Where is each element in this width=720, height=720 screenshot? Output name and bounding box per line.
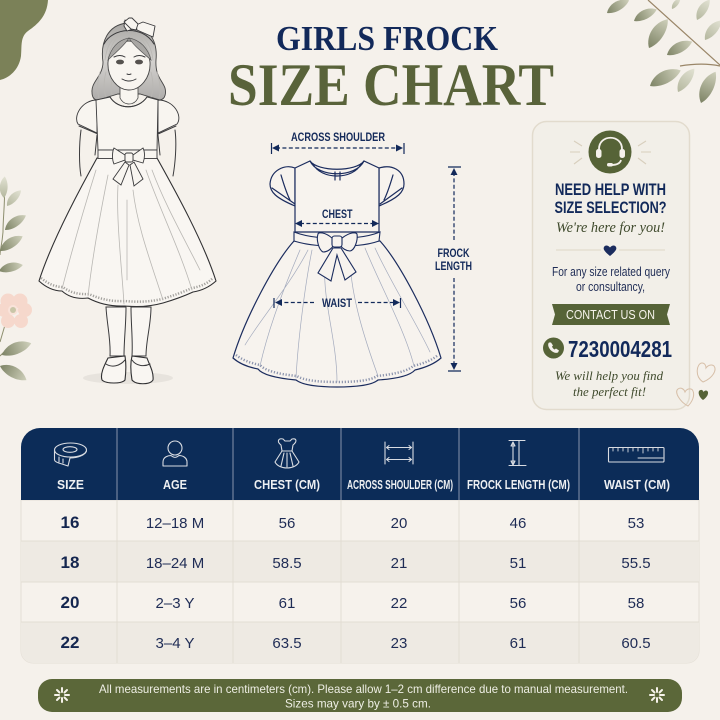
card heading: SIZE SELECTION? [554, 199, 666, 217]
headset icon [570, 130, 651, 174]
row: size 22: 63.5 [272, 635, 302, 652]
row: size 20: 22 [391, 595, 407, 612]
column labels: WAIST (CM) [604, 477, 670, 492]
row: size 18: 51 [510, 555, 526, 572]
row: size 18: 58.5 [272, 555, 302, 572]
column labels: ACROSS SHOULDER (CM) [347, 477, 453, 492]
row: size 20: 56 [510, 595, 526, 612]
bodice [96, 97, 158, 150]
waist bow [113, 162, 143, 186]
row: size 22: 61 [510, 635, 526, 652]
size table [21, 428, 699, 663]
footer text: Sizes may vary by ± 0.5 cm. [285, 696, 431, 710]
row: size 22: 3–4 Y [156, 635, 194, 652]
icon: ruler [608, 448, 664, 462]
heart divider [556, 246, 665, 256]
icon: right flower [650, 688, 664, 702]
row: size 16: 20 [391, 515, 407, 532]
footer note bar [38, 679, 682, 712]
frock waist band [294, 232, 380, 246]
icon: person [163, 441, 187, 466]
column labels: AGE [163, 477, 187, 492]
title: size chart: SIZE CHART [228, 52, 554, 118]
measure: across shoulder [272, 132, 404, 154]
measure: frock length: FROCK [438, 248, 470, 260]
frock skirt [233, 241, 441, 387]
row: size 16: 53 [628, 515, 644, 532]
row: size 16: 16 [61, 513, 79, 532]
measure: across shoulder: ACROSS SHOULDER [291, 132, 386, 144]
row: size 16: 46 [510, 515, 526, 532]
frock bow [318, 248, 356, 281]
icon: length [509, 440, 526, 466]
row: size 20: 20 [61, 593, 79, 612]
contact banner [552, 304, 670, 325]
row: size 22: 23 [391, 635, 407, 652]
decorative hearts [677, 363, 715, 406]
row: size 20: 61 [279, 595, 295, 612]
neck and face [120, 84, 138, 104]
leaves: top right branch [604, 0, 720, 105]
frock sleeves [270, 167, 295, 206]
row: size 20: 58 [628, 595, 644, 612]
row: size 20: 2–3 Y [156, 595, 194, 612]
measure: waist [274, 298, 400, 310]
card closing note [555, 368, 663, 399]
card body text [552, 265, 671, 294]
icon: tape measure [54, 443, 86, 466]
waist band [98, 150, 157, 158]
column labels [57, 477, 670, 492]
row: size 22 [61, 633, 651, 652]
column labels: SIZE [57, 477, 84, 492]
row: size 18: 55.5 [621, 555, 651, 572]
measure: frock length [435, 167, 472, 371]
card heading: NEED HELP WITH [555, 181, 666, 199]
column labels: CHEST (CM) [254, 477, 320, 492]
title: girls frock: GIRLS FROCK [276, 19, 498, 58]
table body background [21, 500, 699, 663]
card heading [554, 181, 666, 217]
row: size 20 [61, 593, 644, 612]
frock measurement diagram [233, 132, 472, 387]
measure: chest [295, 209, 379, 227]
table header [21, 428, 699, 500]
row: size 22: 60.5 [621, 635, 651, 652]
row: size 18: 18–24 M [146, 555, 204, 572]
row: size 16: 56 [279, 515, 295, 532]
contact banner: CONTACT US ON [566, 307, 655, 322]
footer text: All measurements are in centimeters (cm). Please allow 1–2 cm difference due to manual measurement. [99, 682, 628, 696]
card body text: For any size related query [552, 265, 671, 279]
help card [532, 122, 690, 410]
measure: frock length: LENGTH [435, 261, 472, 273]
phone number [543, 336, 672, 362]
measure: waist: WAIST [322, 298, 352, 310]
card tagline: We're here for you! [556, 220, 665, 236]
column labels: FROCK LENGTH (CM) [467, 477, 570, 492]
row: size 18: 21 [391, 555, 407, 572]
card body text: or consultancy, [576, 280, 645, 294]
arms [80, 130, 176, 176]
row: size 16 [61, 513, 644, 532]
row: size 22: 22 [61, 633, 79, 652]
flower [0, 294, 32, 328]
icon: shoulder width [385, 442, 413, 464]
row: size 18 [61, 553, 651, 572]
legs [106, 307, 151, 356]
decorative blob top left [0, 0, 48, 80]
leaves and flower: left branch [0, 176, 33, 384]
icon: left flower [55, 688, 69, 702]
shoe shadow [83, 372, 173, 384]
shoes [101, 356, 126, 383]
phone number: 7230004281 [568, 336, 672, 362]
sleeves [77, 100, 97, 133]
skirt [39, 158, 216, 307]
footer text [99, 682, 628, 710]
icon: dress [275, 439, 299, 468]
measure: chest: CHEST [322, 209, 352, 221]
hair bow [124, 18, 155, 37]
frock bodice [295, 161, 379, 232]
hair [92, 23, 165, 100]
card closing note: the perfect fit! [573, 384, 646, 399]
girl illustration [39, 18, 216, 384]
card closing note: We will help you find [555, 368, 663, 383]
row: size 18: 18 [61, 553, 79, 572]
row: size 16: 12–18 M [146, 515, 204, 532]
